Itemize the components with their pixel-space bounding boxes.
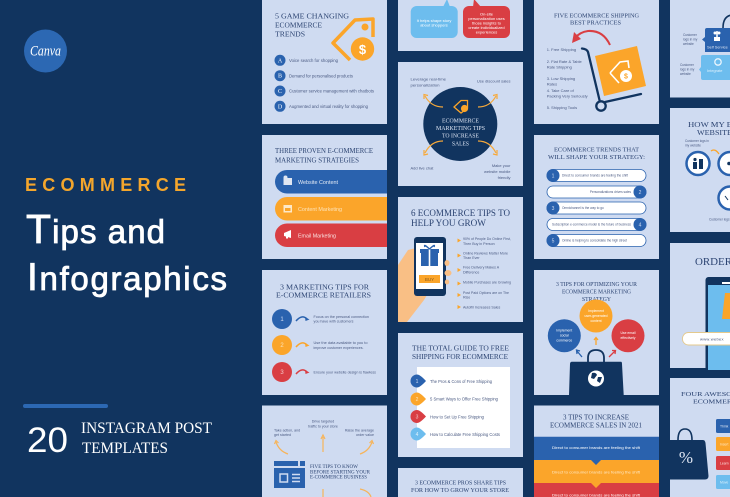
- heading: FIVE ECOMMERCE SHIPPING: [554, 12, 639, 20]
- arrow: red curve: [572, 31, 610, 45]
- panel: 6 tips to grow: [398, 197, 523, 322]
- tip labels: Leverage real-time: [410, 76, 447, 82]
- tip labels: friendly: [498, 175, 510, 180]
- list: Then Buy in Person: [463, 242, 495, 246]
- item 4: 4: [416, 432, 419, 438]
- tip 2: Use the data available to you to: [314, 341, 368, 345]
- phone: [706, 277, 730, 372]
- labels: logs in my: [683, 38, 698, 42]
- main title: Tips and: [26, 206, 165, 252]
- bubble: red: those insights to: [472, 20, 502, 26]
- heading: FOUR AWESO: [681, 391, 730, 398]
- tip labels: Use discount sales: [477, 78, 510, 84]
- main title: Infographics: [27, 256, 227, 299]
- list: [458, 237, 511, 310]
- heading: 3 TIPS TO INCREASE: [563, 414, 629, 422]
- item 2: 5 Smart Ways to Offer Free Shipping: [430, 397, 499, 402]
- list: Rise: [463, 296, 470, 300]
- bubble: blue: [548, 319, 581, 352]
- list: Autofill Increases Sales: [463, 306, 501, 310]
- panel: three proven strategies: [262, 135, 387, 259]
- logo: Canva: Canva: [30, 44, 61, 60]
- band: blue: Direct to consumer brands are feeling the shift: [552, 445, 641, 450]
- tip labels: personalization: [410, 82, 440, 88]
- tip labels: [274, 420, 374, 437]
- heading: HELP YOU GROW: [411, 219, 486, 229]
- label: Customer logs in: [685, 139, 709, 143]
- box: self service: Self Service: [707, 44, 728, 50]
- pill: email marketing: Email Marketing: [298, 234, 336, 240]
- heading: HOW MY E: [688, 120, 730, 129]
- list: 4. Take Care of: [547, 88, 575, 93]
- heading: 6 ECOMMERCE TIPS TO: [411, 209, 510, 219]
- main title: [26, 206, 227, 299]
- item 4: [410, 428, 501, 440]
- bubble: red: [463, 0, 510, 38]
- heading: ECOMMERCE SALES IN 2021: [550, 422, 642, 430]
- tip labels: [410, 76, 511, 180]
- center circle: [423, 87, 497, 161]
- tip labels: Make your: [492, 163, 511, 168]
- buttons: Learn: [720, 462, 729, 466]
- tip 3: 3: [280, 370, 284, 376]
- heading: FOR HOW TO GROW YOUR STORE: [411, 487, 509, 494]
- caption: Customer logs: [709, 218, 730, 222]
- pill: content marketing: Content Marketing: [298, 207, 342, 213]
- tip labels: get started: [274, 433, 291, 437]
- bubble: orange: user-generated: [584, 314, 608, 318]
- list: Voice search for shopping: [289, 58, 339, 63]
- list: Demand for personalised products: [289, 73, 354, 78]
- label: my website: [685, 144, 701, 148]
- trend 2: [547, 186, 646, 198]
- box: integrate: Integrate: [707, 68, 722, 73]
- buttons: Move: [720, 480, 728, 484]
- panel: ecommerce trends: [534, 135, 659, 259]
- heading: [276, 282, 371, 300]
- tip 3: [272, 362, 376, 382]
- tip labels: website mobile: [484, 169, 511, 174]
- item 1: 1: [416, 379, 419, 385]
- count: 20: 20: [27, 421, 68, 460]
- trend 3: [546, 202, 646, 214]
- tip 1: you have with customers: [314, 320, 354, 324]
- list: Augmented and virtual reality for shopping: [289, 104, 369, 109]
- list: B: [278, 74, 282, 80]
- bubble: orange: Implement: [588, 309, 604, 313]
- bubble: blue: It helps shape story: [417, 18, 451, 23]
- divider bar: [23, 404, 108, 408]
- trend 3: 3: [552, 206, 555, 212]
- bubble: red: On-site: [480, 12, 494, 16]
- heading: ECOMMER: [693, 398, 730, 406]
- logo: Canva: [24, 30, 67, 72]
- illustration: hand holding phone: BUY: [425, 277, 434, 282]
- tip labels: traffic to your store: [308, 424, 338, 428]
- trend 5: [546, 234, 646, 247]
- panel: four awesome: [668, 378, 730, 497]
- list: Mobile Purchases are Growing: [463, 281, 511, 285]
- list: C: [278, 89, 282, 95]
- heading: [548, 146, 645, 161]
- list: Rates: [547, 82, 557, 86]
- pill: email marketing: [275, 224, 387, 247]
- list: 2. Flat Rate & Table: [547, 59, 583, 64]
- tip labels: order value: [356, 433, 374, 437]
- panel: self service: [670, 0, 730, 98]
- subtitle: INSTAGRAM POST: [81, 420, 212, 437]
- tip labels: Drive targeted: [312, 420, 334, 424]
- node 2: [718, 152, 730, 175]
- bubble: red: experiences: [476, 30, 497, 34]
- list: Customer service management with chatbots: [289, 89, 375, 94]
- labels: website: [683, 42, 694, 46]
- bubble: blue: [411, 0, 458, 38]
- heading: [411, 209, 510, 229]
- heading: [310, 465, 371, 480]
- heading: 5 GAME CHANGING: [275, 12, 350, 20]
- list: Rate Shipping: [547, 64, 572, 70]
- panel: order: [670, 243, 730, 372]
- trend 4: Subscription e-commerce model is the future of business: [552, 223, 631, 227]
- item 3: [410, 410, 485, 423]
- list: A: [278, 58, 283, 64]
- bubble: orange: [580, 300, 612, 332]
- list: Online Reviews Matter More: [463, 252, 508, 256]
- panel: shipping best practices: [534, 0, 659, 124]
- panel: five tips before starting: [262, 406, 387, 497]
- arrows: [424, 94, 497, 155]
- heading: E-COMMERCE BUSINESS: [310, 476, 367, 480]
- icon: tag: [454, 100, 468, 113]
- trend 1: [546, 169, 646, 182]
- illustration: cart with box: $: [624, 74, 628, 80]
- circle heading: SALES: [452, 140, 469, 148]
- buttons: Insert: [720, 442, 729, 446]
- handle: [723, 15, 730, 28]
- list: Packing Very Seriously: [547, 94, 588, 98]
- labels: Customer: [680, 63, 695, 67]
- bubble: red: effectively: [620, 336, 636, 340]
- node 1: [686, 152, 710, 175]
- list: Than Ever: [463, 256, 480, 260]
- item 1: [410, 374, 493, 388]
- trend 5: Online is helping to consolidate the high street: [562, 239, 627, 243]
- labels: website: [680, 72, 691, 76]
- item 3: 3: [416, 414, 419, 420]
- bubble: blue: commerce: [556, 338, 572, 342]
- heading: BEST PRACTICES: [570, 20, 621, 26]
- panel: 5 game changing trends: [262, 0, 387, 124]
- heading: [556, 282, 637, 303]
- white card: [417, 367, 510, 448]
- circle heading: ECOMMERCE: [442, 117, 479, 124]
- heading: [554, 12, 639, 26]
- heading: 3 TIPS FOR OPTIMIZING YOUR: [556, 282, 637, 288]
- panel: how my website: [670, 108, 730, 232]
- list: 90% of People Do Online First,: [463, 237, 511, 241]
- buttons: [716, 419, 730, 489]
- list: Free Delivery Makes A: [463, 266, 500, 270]
- heading: [412, 344, 509, 361]
- bubble: red: create individualized: [468, 25, 505, 30]
- tip 2: [272, 335, 368, 355]
- item 3: How to Set Up Free Shipping: [430, 414, 485, 419]
- list: 3. Low Shipping: [547, 76, 575, 81]
- tip 2: 2: [280, 343, 284, 349]
- panel: free shipping guide: [398, 333, 523, 457]
- eyebrow: ECOMMERCE: ECOMMERCE: [25, 175, 186, 195]
- icon: price tag: $: [359, 42, 367, 57]
- icon: browser window: [274, 461, 305, 488]
- trend 1: 1: [552, 173, 555, 179]
- trend 2: 2: [639, 190, 642, 196]
- item 2: [410, 392, 499, 406]
- bubble: blue: Implement: [556, 328, 572, 332]
- subtitle: TEMPLATES: [82, 440, 168, 457]
- panel: optimizing marketing strategy: [534, 270, 659, 395]
- item 1: The Pros & Cons of Free Shipping: [430, 379, 493, 384]
- label: [685, 139, 709, 148]
- bubble: red: Use email: [620, 331, 636, 335]
- list: D: [278, 104, 283, 110]
- heading: ECOMMERCE TRENDS THAT: [554, 146, 639, 154]
- tip 2: improve customer experiences.: [314, 346, 364, 350]
- heading: TRENDS: [275, 30, 305, 38]
- circle heading: TO INCREASE: [442, 133, 479, 140]
- heading: [275, 146, 373, 164]
- icon: percent bag: %: [679, 448, 693, 467]
- heading: SHIPPING FOR ECOMMERCE: [412, 352, 508, 361]
- bubble: blue: social: [560, 334, 569, 338]
- bubble: blue: about shoppers: [420, 22, 448, 28]
- item 2: 2: [416, 397, 419, 403]
- panel: speech bubbles: [398, 0, 523, 51]
- trend 4: [547, 218, 646, 231]
- heading: BEFORE STARTING YOUR: [310, 470, 371, 475]
- list: 1. Free Shipping: [547, 47, 576, 52]
- heading: [688, 122, 730, 135]
- buttons: Think: [720, 424, 729, 428]
- band: orange: Direct to consumer brands are feeling the shift: [552, 470, 641, 474]
- panel: tips to increase sales: [534, 406, 659, 497]
- labels: Customer: [683, 33, 698, 37]
- heading: 3 MARKETING TIPS FOR: [280, 282, 369, 291]
- heading: [275, 12, 350, 38]
- bubble: red: personalization uses: [468, 16, 505, 21]
- circle heading: [436, 117, 485, 148]
- pill: content marketing: [275, 197, 387, 220]
- left cover panel: [23, 30, 227, 460]
- list: [547, 47, 588, 110]
- url bar: www.webex: [700, 336, 724, 342]
- tip 1: Focus on the personal connection: [314, 315, 369, 319]
- subtitle: [81, 420, 212, 457]
- trend 4: 4: [639, 222, 642, 228]
- arrow: [711, 150, 719, 154]
- heading: THE TOTAL GUIDE TO FREE: [412, 344, 509, 352]
- heading: 3 ECOMMERCE PROS SHARE TIPS: [415, 480, 506, 486]
- heading: ECOMMERCE: [275, 20, 322, 30]
- heading: [411, 480, 509, 494]
- node 3: [718, 186, 730, 210]
- panel: pros share tips: [398, 468, 523, 497]
- tip labels: Raise the average: [345, 428, 374, 432]
- heading: WEBSITE: [697, 128, 730, 137]
- trend 2: Personalizations drives sales: [590, 190, 631, 194]
- item 4: How to Calculate Free Shipping Costs: [430, 432, 501, 437]
- heading: THREE PROVEN E-COMMERCE: [275, 146, 373, 155]
- heading: WILL SHAPE YOUR STRATEGY:: [548, 154, 645, 161]
- tip 1: 1: [280, 317, 284, 323]
- bubble: red: [612, 319, 644, 352]
- heading: ORDER: [695, 257, 730, 268]
- heading: [681, 392, 730, 404]
- heading: STRATEGY: [582, 297, 612, 303]
- list: [274, 55, 375, 112]
- panel: 3 marketing tips: [262, 270, 387, 395]
- circle heading: MARKETING TIPS: [436, 125, 485, 132]
- trend 5: 5: [552, 238, 555, 244]
- list: Post Paid Options are on The: [463, 291, 509, 295]
- heading: E-COMMERCE RETAILERS: [276, 290, 371, 300]
- labels: [680, 33, 698, 76]
- trend 1: Direct to consumer brands are feeling the shift: [562, 174, 628, 178]
- arrows: [576, 338, 616, 357]
- heading: ECOMMERCE MARKETING: [562, 290, 632, 296]
- heading: MARKETING STRATEGIES: [275, 156, 359, 164]
- panel: marketing tips circle: [398, 62, 523, 186]
- arrows: [274, 435, 374, 497]
- icon: shopping bag with globe: [569, 350, 624, 395]
- tip 3: Ensure your website design is flawless: [314, 371, 376, 375]
- tip labels: Take action, and: [274, 428, 300, 432]
- labels: logs in my: [680, 68, 695, 72]
- trend 3: Omnichannel is the way to go: [562, 206, 604, 210]
- tip labels: Add live chat: [410, 166, 434, 170]
- list: Difference: [463, 270, 479, 274]
- pill: website content: [275, 170, 387, 194]
- pill: website content: Website Content: [298, 180, 338, 186]
- bubble: orange: content: [590, 319, 602, 323]
- heading: FIVE TIPS TO KNOW: [310, 465, 358, 470]
- tip 1: [272, 309, 369, 329]
- list: 5. Shipping Tools: [547, 105, 577, 110]
- heading: [550, 414, 642, 430]
